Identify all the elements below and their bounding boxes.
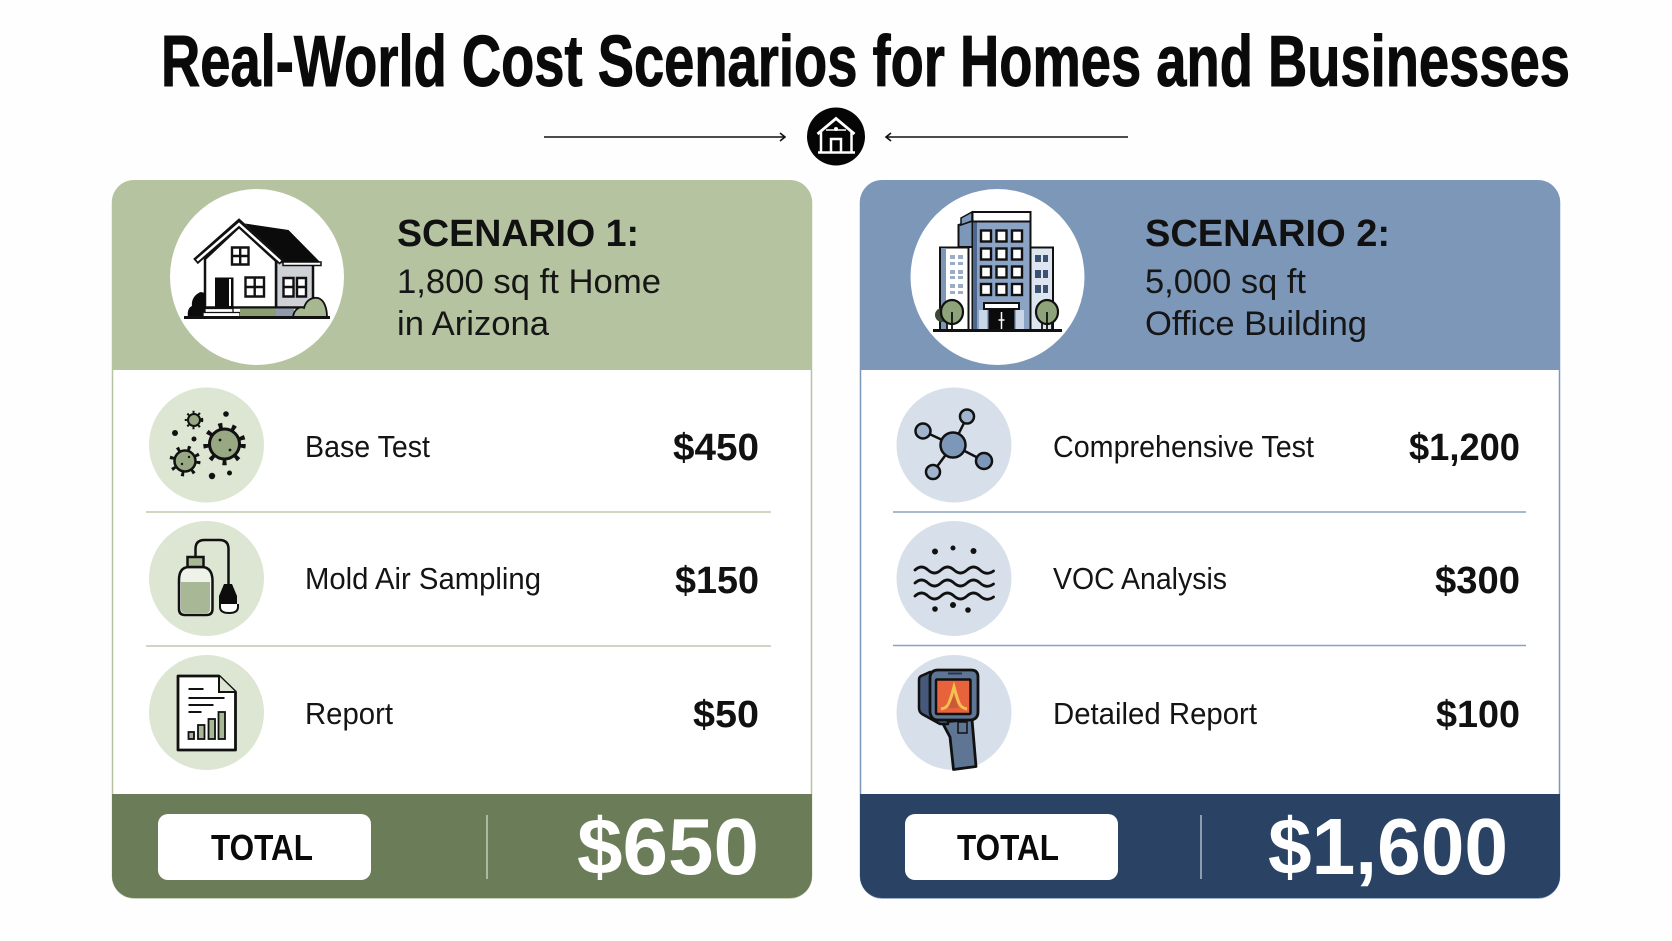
- label: detailed report: Detailed Report: [1053, 696, 1257, 731]
- total amount: $1,600: $1,600: [1268, 802, 1508, 891]
- panel: scenario 2: [860, 180, 1560, 898]
- price: $450: $450: [673, 427, 759, 469]
- row: base test: [149, 388, 759, 502]
- heading: scenario 2: SCENARIO 2:: [1145, 213, 1390, 255]
- price: $300: $300: [1435, 560, 1520, 602]
- text: scenario 1 description: 1,800 sq ft Home: [397, 263, 661, 301]
- label: total: TOTAL: [957, 827, 1059, 868]
- arrow: right: [886, 133, 1128, 141]
- row: detailed report: [896, 655, 1520, 770]
- panel header: scenario 1: [112, 180, 812, 370]
- icon: molecule: [896, 388, 1012, 502]
- label: mold air sampling: Mold Air Sampling: [305, 561, 541, 596]
- panel header: scenario 2: [860, 180, 1560, 370]
- text: scenario 2 description: [1145, 263, 1367, 343]
- icon: report document: [149, 655, 264, 770]
- row: comprehensive test: [896, 388, 1520, 502]
- price: $1,200: $1,200: [1409, 427, 1520, 469]
- text: scenario 1 description: in Arizona: [397, 305, 549, 343]
- total bar: scenario 1: [112, 794, 812, 898]
- price: $100: $100: [1436, 694, 1520, 736]
- icon: air sampler bottle: [149, 521, 264, 636]
- heading: scenario 1: SCENARIO 1:: [397, 213, 639, 255]
- icon: office building: [910, 189, 1084, 365]
- label: report: Report: [305, 696, 393, 731]
- arrow: left: [544, 133, 785, 141]
- price: $150: $150: [675, 560, 759, 602]
- icon: house: [170, 189, 344, 365]
- icon: house badge: [807, 108, 865, 166]
- text: scenario 2 description: Office Building: [1145, 305, 1367, 343]
- panel: scenario 1: [112, 180, 812, 898]
- total bar: scenario 2: [860, 794, 1560, 898]
- icon: mold spores: [149, 388, 264, 502]
- title divider with house badge: [544, 108, 1128, 166]
- label: total: TOTAL: [211, 827, 313, 868]
- row: mold air sampling: [149, 521, 759, 636]
- icon: voc waves: [896, 521, 1012, 636]
- label: base test: Base Test: [305, 429, 430, 464]
- row: voc analysis: [896, 521, 1520, 636]
- text: scenario 1 description: [397, 263, 661, 343]
- label: comprehensive test: Comprehensive Test: [1053, 429, 1314, 464]
- price: $50: $50: [693, 694, 759, 736]
- icon: thermal camera: [896, 655, 1012, 770]
- total amount: $650: $650: [577, 802, 759, 891]
- text: scenario 2 description: 5,000 sq ft: [1145, 263, 1307, 301]
- row: report: [149, 655, 759, 770]
- label: voc analysis: VOC Analysis: [1053, 561, 1227, 596]
